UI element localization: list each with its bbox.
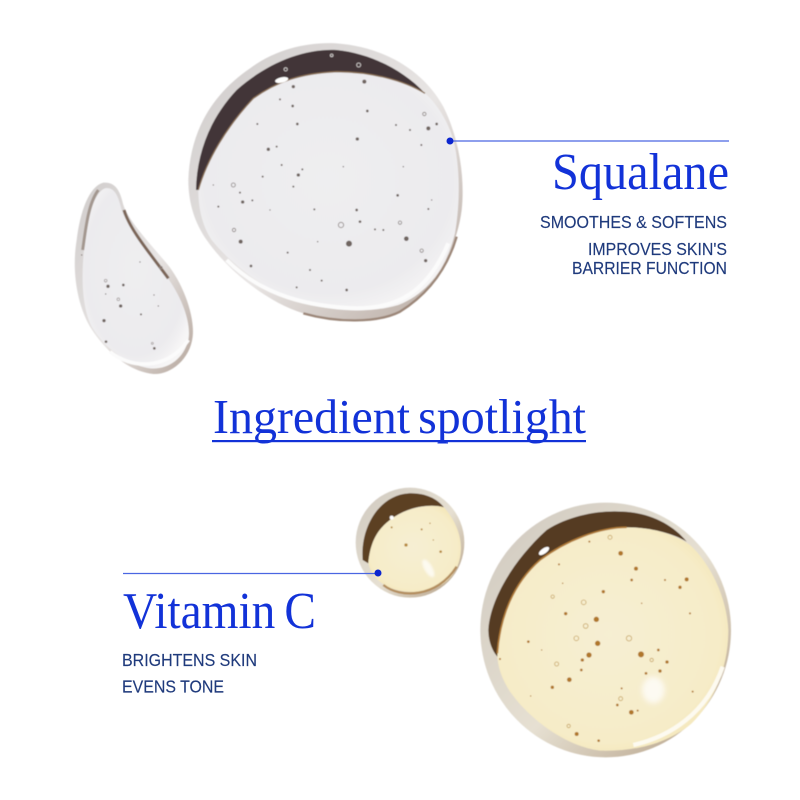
text: vitamin C benefits — [122, 650, 257, 696]
droplet: small vitamin C drop — [356, 488, 464, 598]
text: squalane benefits: SMOOTHES & SOFTENS — [540, 212, 727, 232]
callout: squalane — [446, 138, 729, 278]
text: vitamin C benefits: EVENS TONE — [122, 676, 224, 696]
leader line and dot: vitamin C — [123, 570, 382, 576]
droplet: squalane teardrop smear — [75, 183, 193, 374]
text: squalane benefits: BARRIER FUNCTION — [572, 258, 727, 278]
leader line and dot: squalane — [446, 138, 729, 144]
title: Ingredient spotlight: Ingredient spotlight — [213, 389, 586, 444]
droplet: large vitamin C drop — [480, 503, 731, 757]
text: vitamin C benefits: BRIGHTENS SKIN — [122, 650, 257, 670]
droplet: large squalane drop — [188, 43, 463, 321]
text: squalane benefits: IMPROVES SKIN'S — [588, 239, 727, 259]
heading: Squalane: Squalane — [552, 144, 729, 201]
text: squalane benefits — [540, 212, 727, 278]
callout: vitamin C — [122, 570, 382, 696]
heading: Vitamin C: Vitamin C — [123, 583, 316, 640]
